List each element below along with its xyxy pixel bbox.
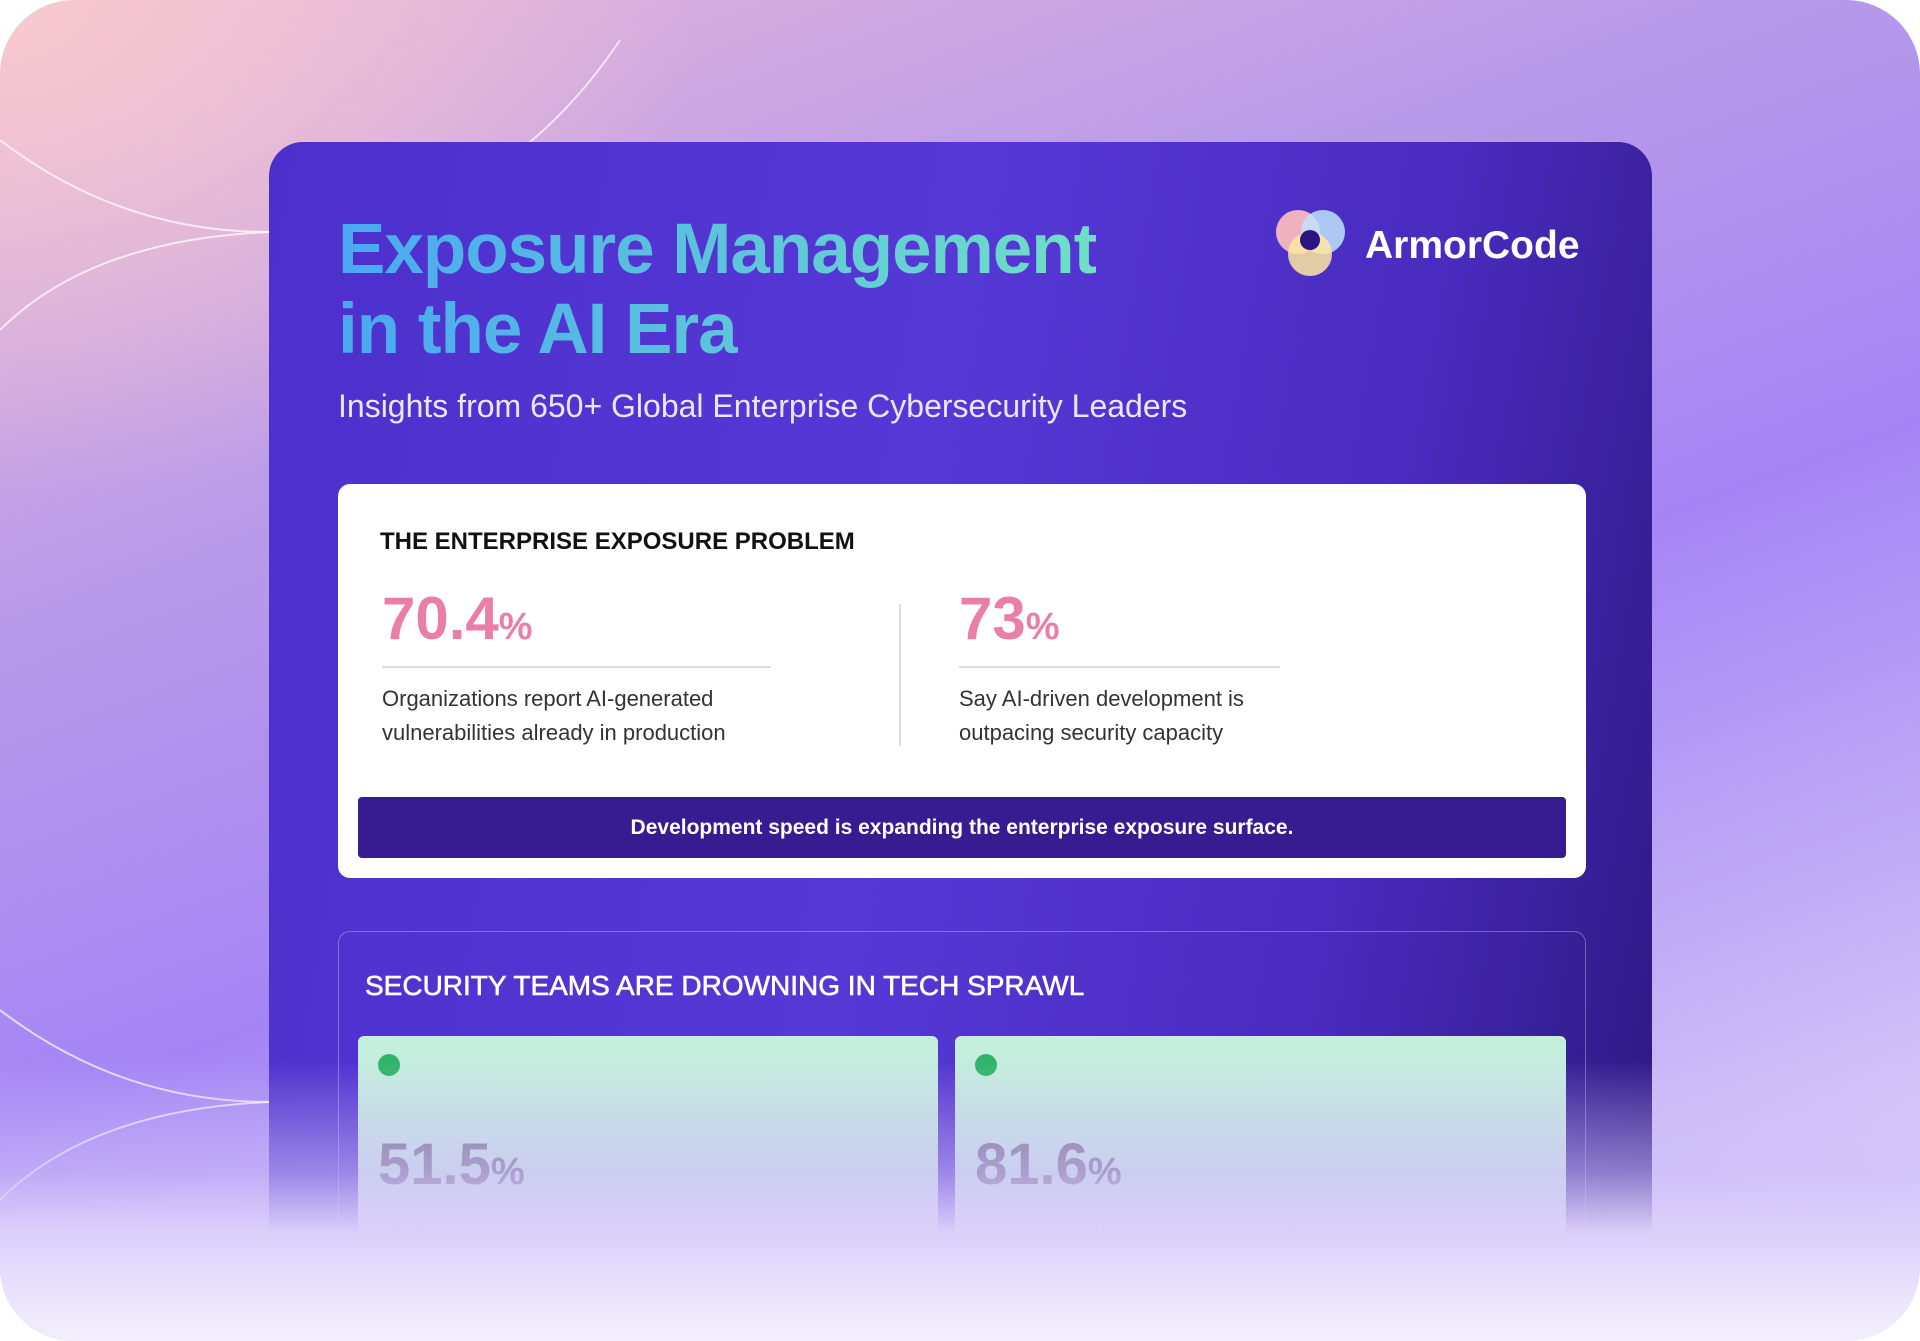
heading: SECURITY TEAMS ARE DROWNING IN TECH SPRAWL bbox=[365, 970, 1084, 1001]
main card bbox=[269, 142, 1652, 1341]
icon: logo circles bbox=[1276, 210, 1345, 276]
stat 70.4%: vulnerabilities already in production bbox=[382, 720, 726, 745]
subtitle: Insights from 650+ Global Enterprise Cybersecurity Leaders bbox=[338, 388, 1187, 424]
stat card 51.5%: Organizations run 11+ security tools bbox=[378, 1216, 728, 1241]
panel: tech sprawl bbox=[338, 931, 1586, 1341]
panel: enterprise exposure problem bbox=[338, 484, 1586, 878]
stat 70.4%: 70.4% bbox=[382, 585, 533, 652]
stat card 81.6%: 81.6% bbox=[975, 1132, 1122, 1197]
callout banner bbox=[358, 797, 1566, 858]
title: Exposure Management bbox=[338, 210, 1096, 289]
stat card 51.5% bbox=[358, 1036, 938, 1341]
stat 73%: outpacing security capacity bbox=[959, 720, 1223, 745]
stat 73%: 73% bbox=[959, 585, 1060, 652]
callout banner: Development speed is expanding the enterprise exposure surface. bbox=[631, 816, 1293, 839]
brand name: ArmorCode bbox=[1365, 224, 1580, 267]
stat 73%: Say AI-driven development is bbox=[959, 686, 1244, 711]
stat 70.4%: Organizations report AI-generated bbox=[382, 686, 713, 711]
heading: THE ENTERPRISE EXPOSURE PROBLEM bbox=[380, 528, 855, 555]
stat 73% bbox=[959, 585, 1280, 745]
logo bbox=[1276, 210, 1580, 276]
title bbox=[338, 210, 1096, 370]
stat card 81.6%: Say fragmented tools significantly hurt their bbox=[975, 1216, 1396, 1241]
stat card 81.6% bbox=[955, 1036, 1566, 1341]
stat 70.4% bbox=[382, 585, 771, 745]
stat card 51.5%: 51.5% bbox=[378, 1132, 525, 1197]
title: in the AI Era bbox=[338, 290, 737, 369]
